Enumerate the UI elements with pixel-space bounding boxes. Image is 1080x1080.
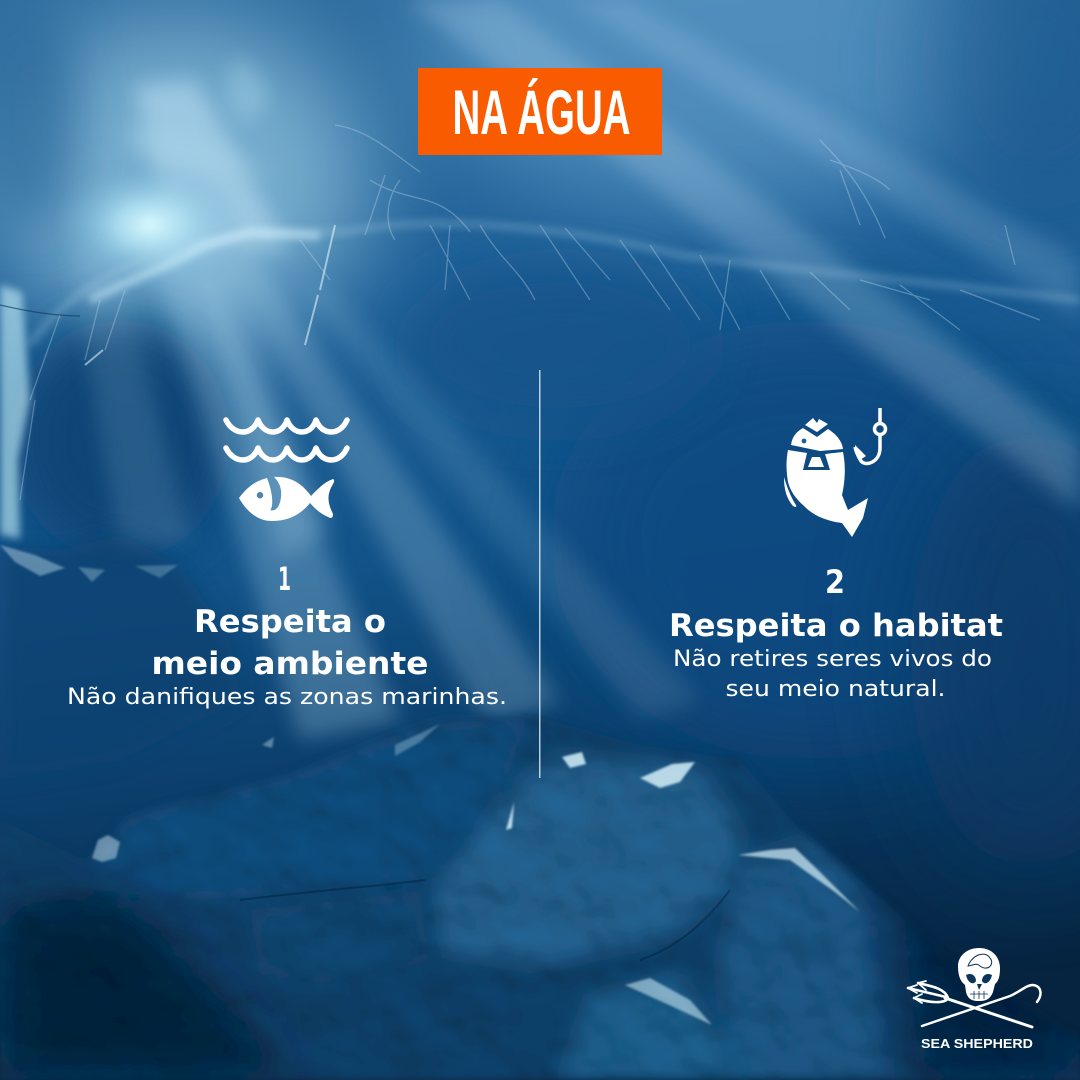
light rays xyxy=(70,0,1080,740)
text block: item 2: Não retires seres vivos do xyxy=(673,647,992,672)
icon: trident and shepherd crook xyxy=(908,981,1040,1027)
text block: item 2: 2 xyxy=(825,563,845,601)
icon: skull xyxy=(958,948,1000,1001)
title badge xyxy=(418,68,662,155)
text block: item 1: Não danifiques as zonas marinhas. xyxy=(67,685,507,710)
text block: item 2: seu meio natural. xyxy=(726,677,946,702)
text block: item 1 xyxy=(67,560,507,710)
text block: item 2 xyxy=(669,563,1003,702)
rocks xyxy=(0,535,1080,1080)
title text: NA ÁGUA xyxy=(452,78,630,148)
roots overhang xyxy=(0,125,1080,500)
text block: item 1: meio ambiente xyxy=(152,646,428,682)
text block: item 1: Respeita o xyxy=(194,604,386,640)
icon: fish on hook xyxy=(784,408,886,537)
logo wordmark: SEA SHEPHERD xyxy=(921,1036,1033,1051)
bright sun glow xyxy=(55,160,245,290)
center divider xyxy=(539,370,540,778)
text block: item 2: Respeita o habitat xyxy=(669,608,1003,644)
icon: waves and fish xyxy=(226,420,347,521)
logo: Sea Shepherd xyxy=(908,948,1040,1051)
text block: item 1: 1 xyxy=(278,560,291,598)
